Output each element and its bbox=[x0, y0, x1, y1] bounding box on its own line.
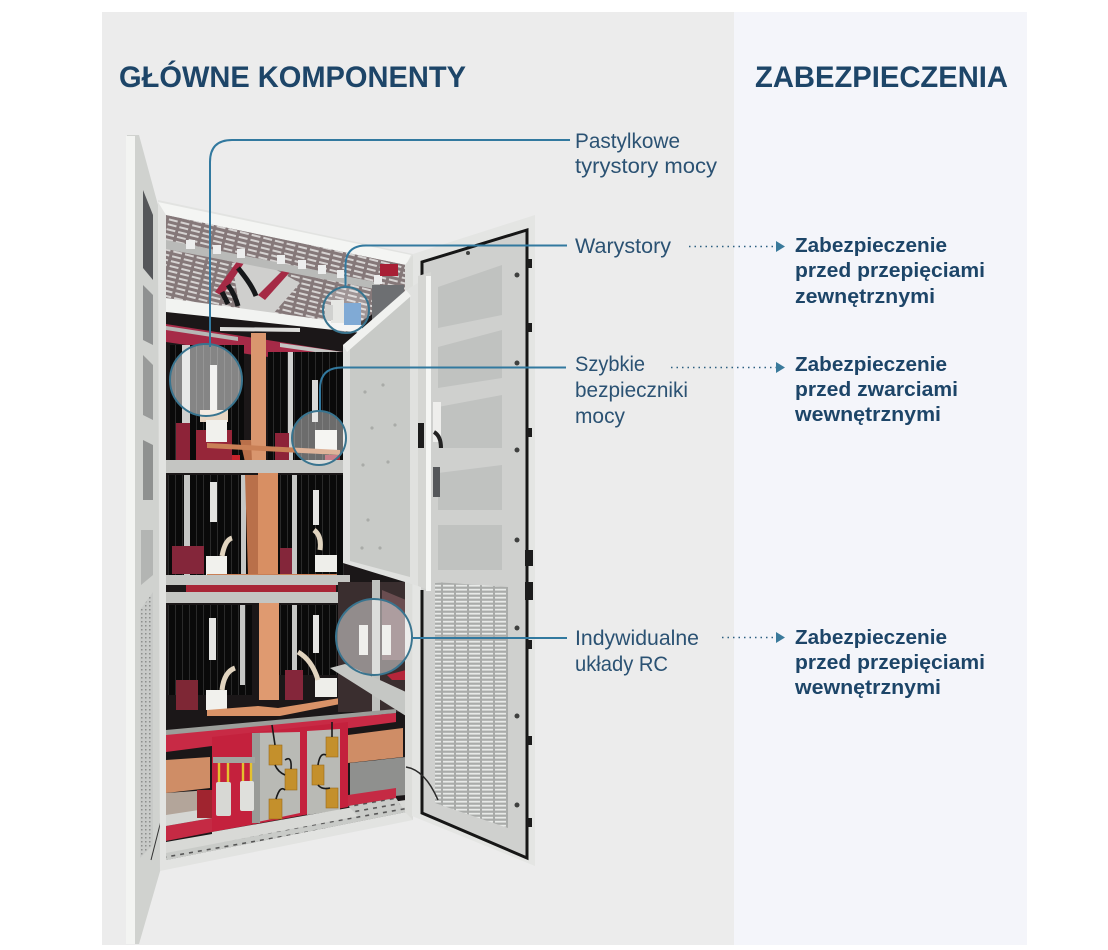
grey resistor plates bbox=[252, 729, 340, 823]
warystor blue block bbox=[325, 300, 361, 325]
label: varistors: Warystory bbox=[575, 235, 671, 258]
heading: protections: ZABEZPIECZENIA bbox=[755, 61, 1008, 94]
cabinet frame bbox=[158, 200, 413, 871]
white cross beam bbox=[166, 298, 362, 333]
protection text: internal overvoltage: wewnętrznymi bbox=[794, 676, 941, 699]
label: fuses: mocy bbox=[575, 405, 625, 428]
protection text: internal short circuits: wewnętrznymi bbox=[794, 403, 941, 426]
inner open door bbox=[343, 283, 418, 586]
door bolts bbox=[466, 251, 520, 808]
top frame band bbox=[158, 202, 411, 265]
protection text: internal short circuits: Zabezpieczenie bbox=[795, 353, 947, 376]
protection text: external overvoltage: Zabezpieczenie bbox=[795, 234, 947, 257]
panel: main components background bbox=[102, 12, 734, 945]
cabinet illustration bbox=[126, 135, 535, 944]
protection text: external overvoltage: zewnętrznymi bbox=[795, 285, 935, 308]
label: thyristors: tyrystory mocy bbox=[575, 155, 718, 178]
leader line: thyristors bbox=[210, 140, 570, 347]
callout lens: RC circuit bbox=[336, 599, 412, 675]
red supports and fuses bbox=[172, 410, 340, 716]
protection text: internal overvoltage: przed przepięciami bbox=[795, 651, 985, 674]
label: RC circuits: układy RC bbox=[575, 653, 668, 676]
heading: main components: GŁÓWNE KOMPONENTY bbox=[119, 60, 466, 94]
heat sinks bbox=[168, 345, 344, 695]
callout lens: thyristor bbox=[170, 344, 242, 416]
callout lens: varistor bbox=[323, 287, 369, 333]
door hinges bbox=[525, 259, 533, 827]
ground wire bbox=[406, 767, 438, 800]
leader line: RC bbox=[413, 637, 567, 639]
label: fuses: bezpieczniki bbox=[575, 379, 688, 402]
label: fuses: Szybkie bbox=[575, 353, 645, 376]
callout lens: fast fuse bbox=[292, 411, 346, 465]
door recess panels bbox=[438, 265, 502, 570]
left door bbox=[126, 135, 165, 944]
door handle bbox=[433, 402, 441, 442]
hinge column bbox=[418, 272, 431, 591]
outer right door bbox=[406, 215, 535, 866]
capacitors bbox=[213, 757, 255, 816]
arrow: varistors to protection bbox=[689, 241, 785, 252]
arrow: fuses to protection bbox=[671, 362, 785, 373]
gold resistors bbox=[269, 737, 338, 819]
label: RC circuits: Indywidualne bbox=[575, 627, 699, 650]
upper red busbars bbox=[166, 324, 343, 368]
cabinet interior bbox=[166, 215, 406, 860]
label: thyristors: Pastylkowe bbox=[575, 130, 680, 153]
lower red bars and copper bbox=[166, 709, 406, 841]
arrow: RC to protection bbox=[722, 632, 785, 643]
roof perforated panels bbox=[166, 215, 406, 332]
copper central busbar bbox=[240, 333, 279, 700]
panel: protections background bbox=[734, 12, 1027, 945]
red mounting panel bbox=[212, 722, 348, 832]
leader line: fuses bbox=[320, 368, 566, 411]
lower right interior bbox=[330, 580, 406, 720]
protection text: external overvoltage: przed przepięciami bbox=[795, 259, 985, 282]
resistor wiring bbox=[272, 722, 332, 799]
silver horizontal bars bbox=[166, 460, 372, 603]
floor rail bbox=[166, 798, 406, 860]
right frame column bbox=[405, 255, 413, 820]
protection text: internal short circuits: przed zwarciami bbox=[795, 378, 958, 401]
protection text: internal overvoltage: Zabezpieczenie bbox=[795, 626, 947, 649]
ventilation grille bbox=[435, 582, 508, 828]
leader line: varistors bbox=[346, 246, 567, 288]
